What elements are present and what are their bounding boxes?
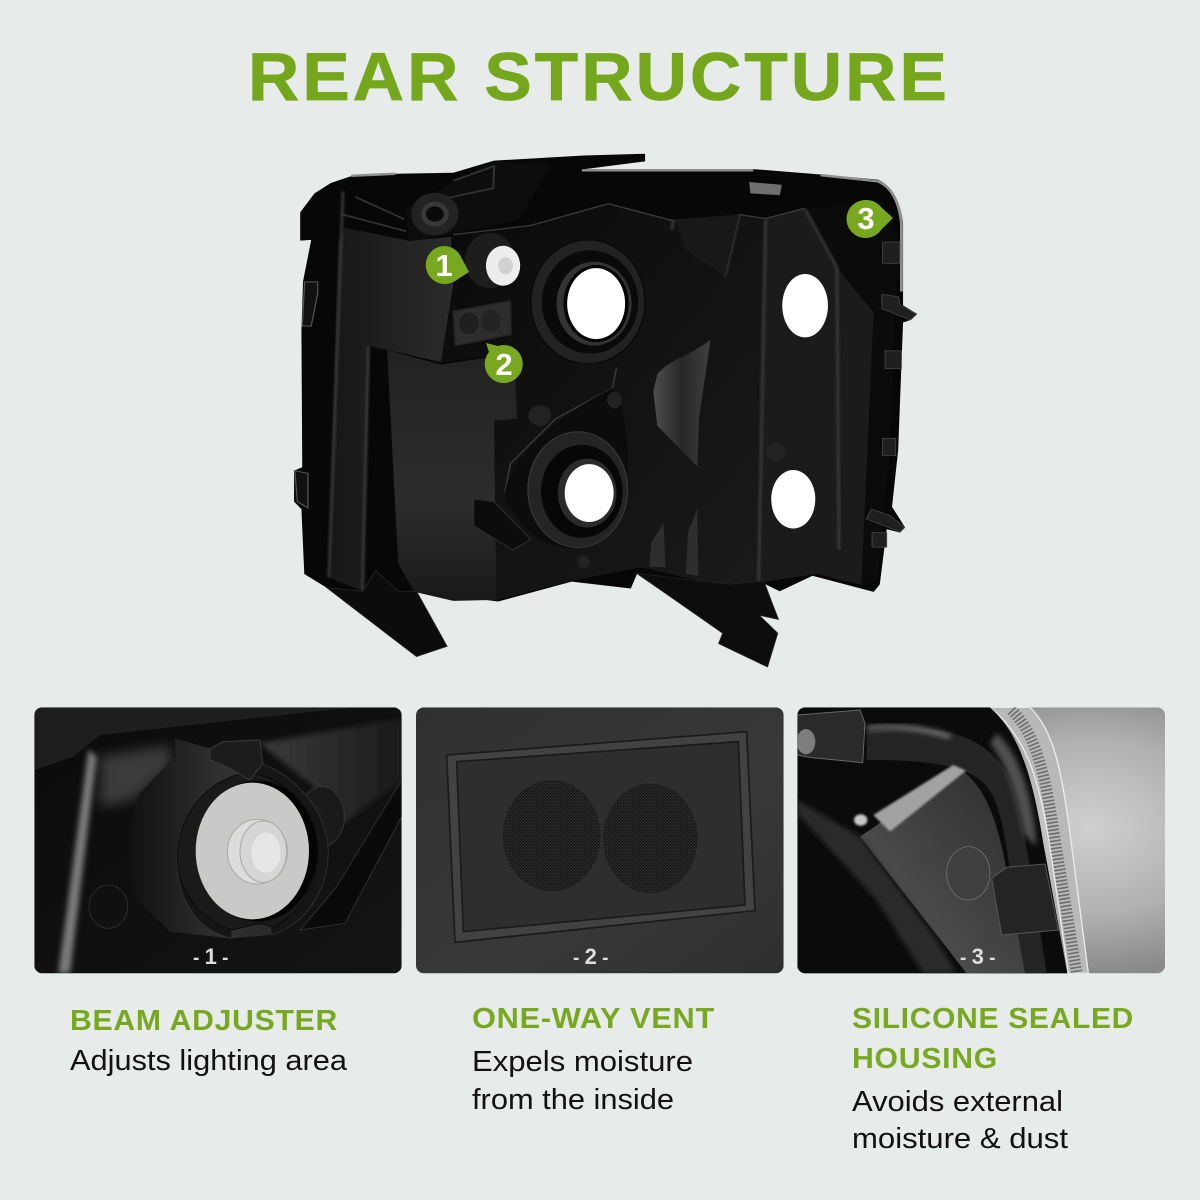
central housing	[441, 204, 766, 600]
lower lens socket	[504, 388, 628, 548]
inner wall panel	[860, 768, 1025, 973]
right dark channel	[804, 205, 898, 585]
caption 2 heading: ONE-WAY VENT	[472, 1003, 715, 1035]
caption 1 body: Adjusts lighting area	[70, 1045, 348, 1077]
upper lens socket	[531, 240, 645, 364]
mounting foot right	[637, 573, 779, 667]
lower diagonal band	[797, 800, 957, 973]
right housing wall	[759, 209, 874, 585]
lower bracket tab	[474, 499, 531, 550]
recess shadow	[232, 780, 317, 922]
badge 1	[426, 246, 469, 284]
panel number: - 2 -	[573, 944, 608, 969]
lower left wall	[387, 350, 517, 601]
left side clips	[295, 282, 318, 508]
vertical highlight	[58, 750, 97, 973]
dimple right	[306, 786, 344, 846]
right mesh disc	[603, 783, 698, 893]
badge 3: 3	[857, 201, 875, 236]
badge 1: 1	[435, 248, 453, 283]
badge 2: 2	[495, 347, 513, 382]
clip tab	[992, 864, 1058, 935]
caption 3 body: Avoids external	[852, 1086, 1063, 1118]
clear lens seal strip	[990, 707, 1088, 973]
caption 3 heading: SILICONE SEALED	[852, 1003, 1134, 1035]
top left bracket	[797, 710, 865, 763]
right side clips	[866, 242, 917, 547]
metal disc	[196, 783, 309, 919]
mounting foot left	[327, 571, 447, 657]
caption 1	[70, 1005, 348, 1077]
caption 2	[472, 1003, 715, 1116]
diagonal highlight	[873, 765, 966, 832]
caption 2 body: Expels moisture	[472, 1046, 693, 1078]
caption 3 heading: HOUSING	[852, 1043, 998, 1075]
gear socket	[411, 193, 459, 235]
panel 3: silicone sealed housing photo	[797, 707, 1165, 973]
upper left sheen	[100, 745, 170, 807]
caption 3	[852, 1003, 1134, 1155]
sealed dimple	[947, 847, 990, 900]
upper lens opening	[567, 268, 625, 339]
dark housing	[797, 707, 1067, 973]
housing silhouette	[294, 154, 917, 667]
caption 2 body	[472, 1046, 693, 1116]
caption 2 body: from the inside	[472, 1084, 674, 1116]
ridge seam line	[453, 204, 805, 495]
left mesh disc	[503, 780, 601, 891]
caption 3 body: moisture & dust	[852, 1123, 1068, 1155]
panel number: - 3 -	[960, 944, 995, 969]
top hinge tab	[210, 740, 263, 780]
vent rectangle	[453, 301, 511, 346]
lower rib	[649, 509, 698, 576]
adjuster housing cylinder	[138, 738, 314, 938]
caption 1 heading: BEAM ADJUSTER	[70, 1005, 338, 1037]
top clip arm	[406, 161, 551, 242]
seal ribs	[1012, 710, 1077, 973]
lower lens opening	[565, 464, 614, 522]
headlight rear housing photo	[294, 154, 917, 667]
right upper lens opening	[782, 274, 828, 337]
right lower lens opening	[771, 470, 815, 529]
dimple left	[89, 885, 128, 928]
c clip inner band	[177, 775, 318, 930]
lower right ridge	[300, 780, 402, 930]
left wall panel	[329, 228, 453, 591]
top arm highlight	[341, 166, 494, 231]
badge 3	[847, 200, 893, 238]
beam adjuster	[465, 233, 520, 288]
edge creases	[329, 192, 839, 591]
title: REAR STRUCTURE	[248, 39, 950, 115]
panel 2: one-way vent photo	[416, 707, 784, 973]
vent frame	[447, 732, 755, 942]
caption 3 heading	[852, 1003, 1134, 1075]
screw posts	[528, 392, 786, 568]
top tab	[749, 182, 782, 195]
badge 2	[485, 343, 523, 383]
upper ribs	[676, 215, 739, 276]
right shiny wall	[260, 718, 402, 827]
c-shaped clip	[177, 763, 328, 938]
caption 3 body	[852, 1086, 1068, 1155]
panel 1: beam adjuster photo	[34, 707, 402, 973]
panel number: - 1 -	[193, 944, 228, 969]
vent inner recess	[457, 742, 745, 932]
channel sheen	[990, 733, 1037, 847]
outer channel band	[867, 729, 1047, 973]
center cone bump	[653, 340, 710, 467]
top rim highlights	[351, 170, 901, 292]
bolt head	[227, 819, 287, 884]
upper shell band	[34, 707, 353, 770]
